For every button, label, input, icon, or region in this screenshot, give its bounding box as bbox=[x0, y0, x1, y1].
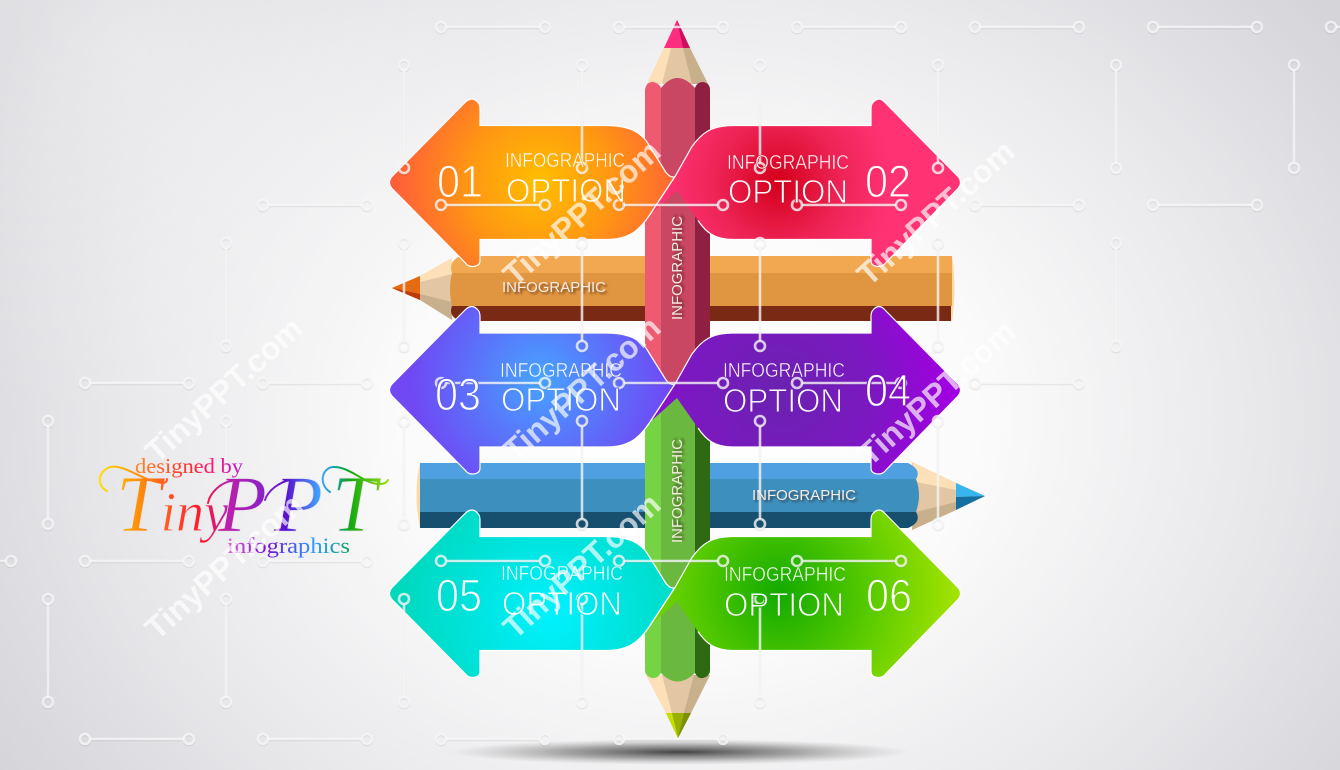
watermarks: TinyPPT.com: TinyPPT.com bbox=[496, 133, 667, 293]
text: option 06: INFOGRAPHIC bbox=[724, 564, 846, 586]
logo: TinyPPT infographics bbox=[100, 454, 388, 558]
watermarks: TinyPPT.com: TinyPPT.com bbox=[496, 309, 667, 469]
text: option 04: OPTION bbox=[723, 382, 843, 419]
arrow 06 bbox=[650, 510, 960, 678]
arrow 03 bbox=[390, 306, 675, 474]
label: red pencil: INFOGRAPHIC bbox=[669, 216, 686, 320]
text: option 02: OPTION bbox=[728, 173, 848, 210]
text: option 05: OPTION bbox=[502, 585, 622, 622]
watermarks: TinyPPT.com: TinyPPT.com bbox=[851, 313, 1022, 473]
pencil: orange horizontal bbox=[392, 256, 954, 321]
text: option 01: 01 bbox=[437, 156, 483, 207]
text: option 03: 03 bbox=[435, 369, 481, 420]
text: option 02 bbox=[727, 152, 911, 210]
text: option 04: INFOGRAPHIC bbox=[723, 360, 845, 382]
logo: TinyPPT infographics: PPT bbox=[217, 461, 382, 549]
watermarks: TinyPPT.com: TinyPPT.com bbox=[138, 310, 309, 470]
text: option 01 bbox=[437, 150, 626, 209]
watermarks: TinyPPT.com: TinyPPT.com bbox=[138, 487, 309, 647]
text: option 04: 04 bbox=[865, 365, 911, 416]
text: option 05: INFOGRAPHIC bbox=[501, 563, 623, 585]
pencil: green vertical bbox=[645, 392, 710, 738]
text: option 02: 02 bbox=[865, 156, 911, 207]
label: green pencil: INFOGRAPHIC bbox=[669, 439, 686, 543]
arrow 04 bbox=[650, 306, 960, 474]
text: option 01: OPTION bbox=[506, 172, 626, 209]
watermarks: TinyPPT.com: TinyPPT.com bbox=[496, 486, 667, 646]
label: orange pencil: INFOGRAPHIC bbox=[502, 279, 606, 296]
text: option 06: 06 bbox=[866, 570, 912, 621]
logo: TinyPPT infographics: Tiny bbox=[116, 461, 229, 549]
text: option 05 bbox=[436, 563, 623, 622]
text: option 06: OPTION bbox=[724, 586, 844, 623]
watermarks: TinyPPT.com bbox=[138, 133, 1022, 647]
text: option 03: INFOGRAPHIC bbox=[500, 360, 622, 382]
pencil: blue horizontal bbox=[416, 462, 985, 530]
logo: TinyPPT infographics: designed by bbox=[135, 454, 244, 478]
text: option 03: OPTION bbox=[501, 381, 621, 418]
arrow 01 bbox=[390, 99, 675, 266]
text: option 05: 05 bbox=[436, 570, 482, 621]
arrow 05 bbox=[390, 510, 675, 678]
text: option 01: INFOGRAPHIC bbox=[505, 150, 625, 172]
logo: TinyPPT infographics: infographics bbox=[227, 533, 350, 558]
watermarks: TinyPPT.com: TinyPPT.com bbox=[850, 133, 1021, 293]
text: option 02: INFOGRAPHIC bbox=[727, 152, 849, 174]
label: blue pencil: INFOGRAPHIC bbox=[752, 487, 856, 504]
pencil: red vertical bbox=[645, 20, 710, 392]
text: option 04 bbox=[723, 360, 911, 419]
text: option 06 bbox=[724, 564, 912, 623]
ground shadow bbox=[448, 739, 912, 765]
arrow 02 bbox=[650, 99, 960, 266]
text: option 03 bbox=[435, 360, 622, 420]
